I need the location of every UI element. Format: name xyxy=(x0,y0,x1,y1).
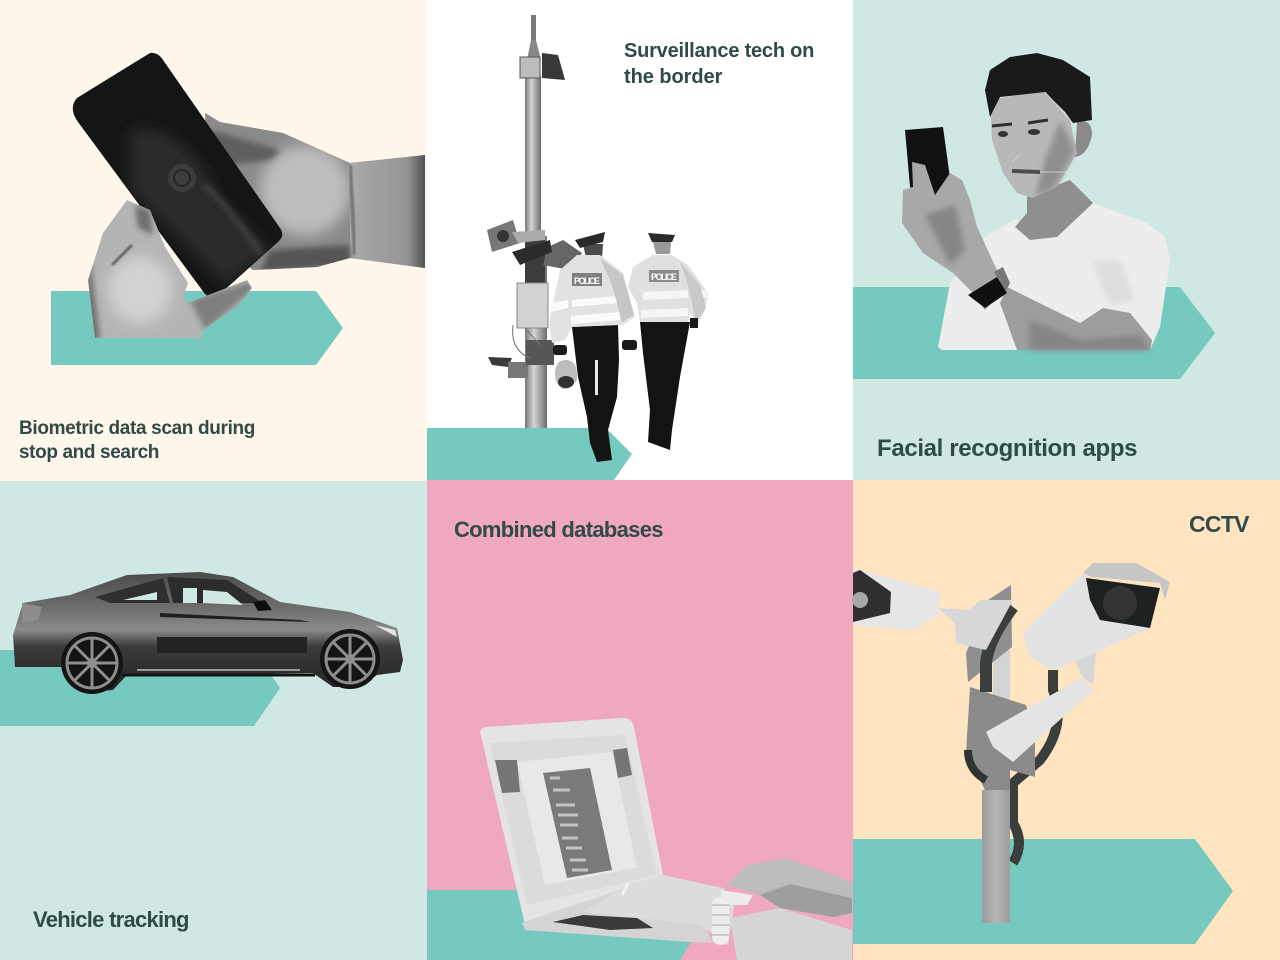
heading: vehicle tracking: Vehicle tracking xyxy=(33,907,189,932)
panel: combined databases xyxy=(427,480,853,960)
arrow: border panel xyxy=(427,428,632,480)
photo: hands typing xyxy=(583,858,852,960)
arrow: facial recognition panel xyxy=(853,287,1215,379)
heading: surveillance tech: the border xyxy=(624,66,723,88)
arrow: CCTV panel xyxy=(853,839,1233,944)
arrow: combined databases panel xyxy=(427,890,705,960)
photo: man scanning face with phone xyxy=(902,53,1170,350)
photo: police officer left: POLICE xyxy=(574,276,600,286)
panel: facial recognition apps xyxy=(853,0,1280,481)
photo: CCTV pole and cameras xyxy=(852,563,1170,923)
heading: biometric data scan: stop and search xyxy=(19,442,159,463)
panel: CCTV xyxy=(852,480,1280,960)
photo: police officer left xyxy=(549,232,637,462)
heading: combined databases: Combined databases xyxy=(454,517,663,542)
photo: car xyxy=(13,572,403,694)
photo: police officer right xyxy=(628,233,708,450)
panel: biometric data scan xyxy=(0,0,427,481)
arrow: biometric panel xyxy=(51,291,343,365)
photo: police officer right: POLICE xyxy=(651,272,677,282)
heading: facial recognition: Facial recognition apps xyxy=(877,435,1137,462)
heading: CCTV: CCTV xyxy=(1189,511,1250,537)
panel: surveillance tech on the border xyxy=(427,0,853,481)
icon: front wheel xyxy=(320,629,380,689)
arrow: vehicle tracking panel xyxy=(0,650,280,726)
photo: hand holding phone xyxy=(73,53,426,340)
panel: vehicle tracking xyxy=(0,481,427,960)
heading: biometric data scan: Biometric data scan during xyxy=(19,418,255,439)
photo: surveillance pole xyxy=(487,15,582,430)
photo: laptop xyxy=(480,718,713,943)
icon: rear wheel xyxy=(61,632,123,694)
heading: surveillance tech: Surveillance tech on xyxy=(624,40,814,62)
